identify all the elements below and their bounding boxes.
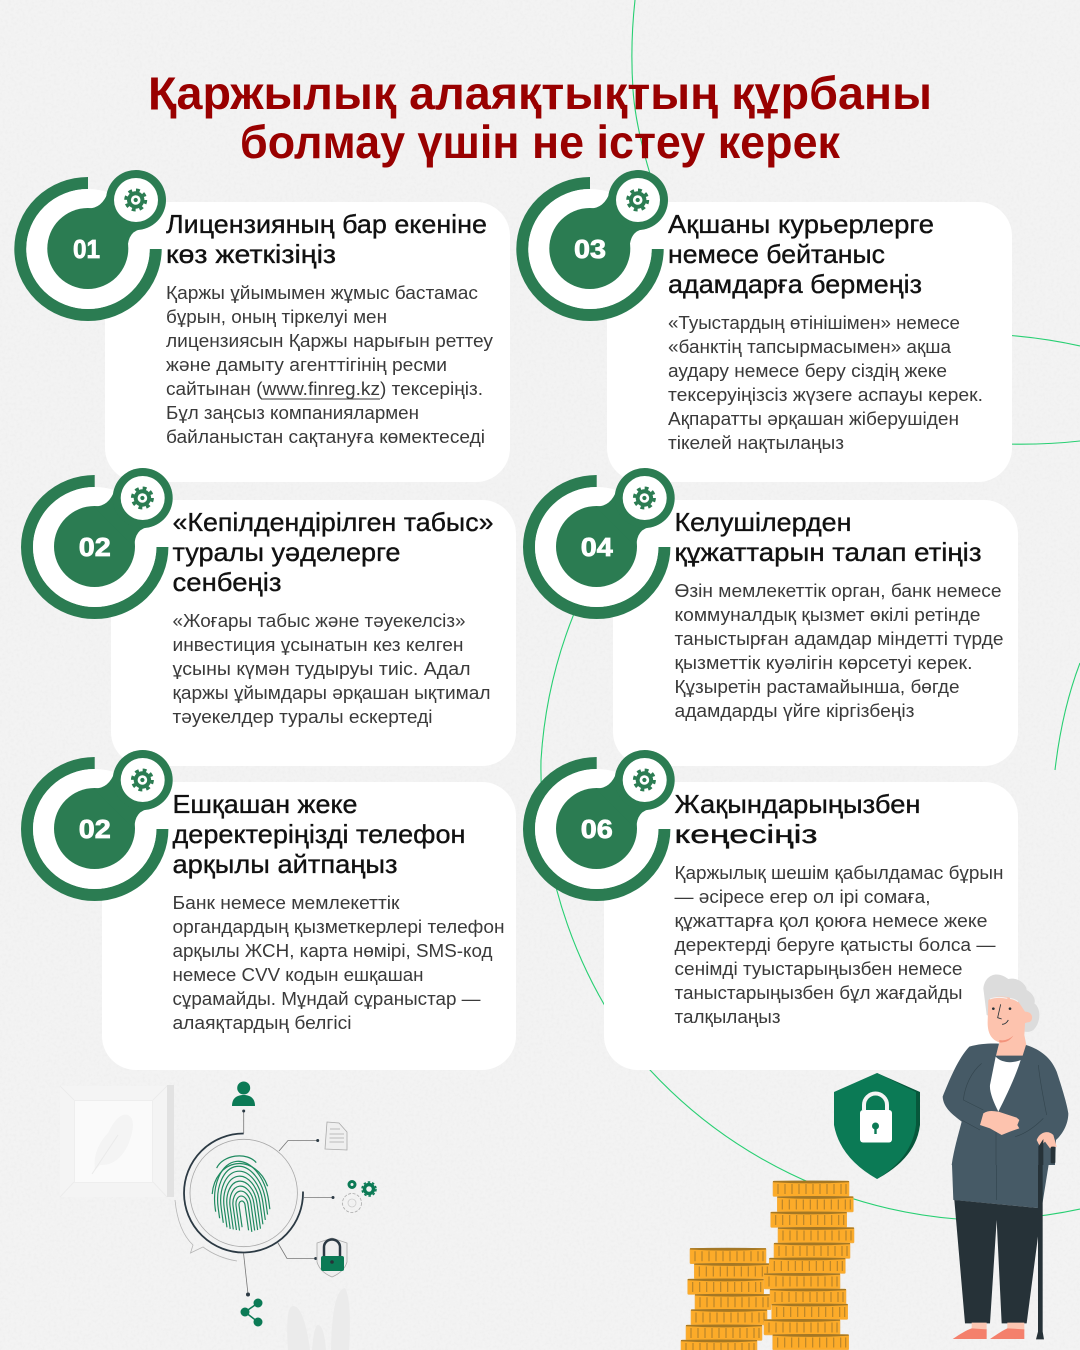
badge 02 (27, 468, 173, 613)
body 02: инвестиция ұсынатын кез келген (172, 635, 464, 655)
icon: padlock shield (317, 1238, 347, 1277)
fingerprint diagram (175, 1082, 376, 1326)
body 02: ұсыны күмән тудыруы тиіс. Адал (172, 659, 470, 679)
body 03: тексеруіңізсіз жүзеге аспауы керек. (668, 385, 983, 405)
heading 02 (172, 507, 494, 597)
icon: share (241, 1299, 262, 1326)
badge 02: 02 (79, 532, 111, 562)
body 06: таныстарыңызбен бұл жағдайды (674, 983, 962, 1003)
body 02: қаржы ұйымдары әрқашан ықтимал (172, 683, 490, 703)
badge 04: 04 (581, 532, 613, 562)
body 04 (674, 581, 1004, 721)
body 01: Қаржы ұйымымен жұмыс бастамас (166, 283, 478, 303)
panel: card 06 (529, 750, 1018, 1070)
heading 05: деректеріңізді телефон (172, 819, 466, 849)
heading 03: немесе бейтаныс (668, 239, 885, 269)
panel: card 03 (522, 170, 1012, 482)
body 03 (668, 313, 983, 453)
panel: card 02 (27, 468, 516, 766)
body 03: аудару немесе беру сіздің жеке (668, 361, 947, 381)
heading 01: көз жеткізіңіз (166, 239, 336, 269)
body 05: сұрамайды. Мұндай сұраныстар — (172, 989, 481, 1009)
body 05 (172, 893, 504, 1033)
icon: document (325, 1122, 347, 1150)
body 02: тәуекелдер туралы ескертеді (172, 707, 432, 727)
fingerprint (207, 1152, 274, 1237)
body 06: сенімді туыстарыңызбен немесе (674, 959, 962, 979)
title: болмау үшін не істеу керек (240, 116, 841, 168)
heading 03: адамдарға бермеңіз (668, 269, 922, 299)
heading 04 (674, 507, 982, 567)
badge 06: 06 (581, 814, 613, 844)
heading 06 (674, 789, 920, 849)
body 05: органдардың қызметкерлері телефон (172, 917, 504, 937)
heading 02: «Кепілдендірілген табыс» (172, 507, 494, 537)
badge 02 second (27, 750, 173, 895)
heading 03: Ақшаны курьерлерге (668, 209, 934, 239)
badge 01 (20, 170, 166, 315)
badge 04 (529, 468, 675, 613)
body 04: таныстырған адамдар міндетті түрде (674, 629, 1004, 649)
body 06: — әсіресе егер ол ірі сомаға, (674, 887, 930, 907)
body 05: алаяқтардың белгісі (172, 1013, 352, 1033)
body 05: немесе CVV кодын ешқашан (172, 965, 424, 985)
elderly woman with cane (943, 974, 1068, 1339)
heading 01 (166, 209, 487, 269)
body 01: Бұл заңсыз компаниялармен (166, 403, 419, 423)
body 06: талқылаңыз (674, 1007, 780, 1027)
panel: card 05 (27, 750, 516, 1070)
body 01: бұрын, оның тіркелуі мен (166, 307, 387, 327)
body 01: және дамыту агенттігінің ресми (166, 355, 447, 375)
body 04: адамдарды үйге кіргізбеңіз (674, 701, 914, 721)
decorative green curves (541, 0, 1080, 1220)
heading 05: Ешқашан жеке (172, 789, 358, 819)
heading 02: туралы уәделерге (172, 537, 400, 567)
icon: green security shield (834, 1073, 920, 1179)
body 01 (166, 283, 493, 447)
woman lower body (952, 1112, 1057, 1339)
faint cactus illustration (287, 1288, 350, 1350)
coin stacks (681, 1180, 854, 1350)
title: Қаржылық алаяқтықтың құрбаны (148, 67, 932, 119)
heading 06: Жақындарыңызбен (674, 789, 920, 819)
left coin stack (681, 1248, 771, 1350)
heading 05 (172, 789, 466, 879)
body 01: лицензиясын Қаржы нарығын реттеу (166, 331, 493, 351)
body 06: құжаттарға қол қоюға немесе жеке (674, 911, 988, 931)
badge 03 (522, 170, 668, 315)
body 03: «банктің тапсырмасымен» ақша (668, 337, 952, 357)
heading 02: сенбеңіз (172, 567, 282, 597)
connectors (244, 1111, 333, 1294)
icon: person (232, 1082, 255, 1106)
body 05: Банк немесе мемлекеттік (172, 893, 400, 913)
panel: card 04 (529, 468, 1018, 766)
panel: card 01 (20, 170, 510, 482)
heading 05: арқылы айтпаңыз (172, 849, 398, 879)
woman upper body (943, 974, 1068, 1165)
icon: gears (342, 1182, 376, 1212)
heading 04: Келушілерден (674, 507, 852, 537)
badge 03: 03 (574, 234, 606, 264)
body 01: сайтынан (www.finreg.kz) тексеріңіз. (166, 379, 483, 399)
body 06: деректерді беруге қатысты болса — (674, 935, 996, 955)
faint window illustration (60, 1085, 174, 1197)
body 04: коммуналдық қызмет өкілі ретінде (674, 605, 980, 625)
body 03: «Туыстардың өтінішімен» немесе (668, 313, 960, 333)
body 03: тікелей нақтылаңыз (668, 433, 844, 453)
body 05: арқылы ЖСН, карта нөмірі, SMS-код (172, 941, 493, 961)
fingerprint ring (175, 1133, 303, 1261)
badge 02 second: 02 (79, 814, 111, 844)
body 06 (674, 863, 1004, 1027)
body 02 (172, 611, 490, 727)
heading 01: Лицензияның бар екеніне (166, 209, 487, 239)
heading 06: кеңесіңіз (674, 819, 818, 849)
body 01: байланыстан сақтануға көмектеседі (166, 427, 485, 447)
body 06: Қаржылық шешім қабылдамас бұрын (674, 863, 1004, 883)
body 03: Ақпаратты әрқашан жіберушіден (668, 409, 959, 429)
heading 04: құжаттарын талап етіңіз (674, 537, 982, 567)
badge 06 (529, 750, 675, 895)
body 04: қызметтік куәлігін көрсетуі керек. (674, 653, 972, 673)
body 04: Құзыретін растамайынша, бөгде (674, 677, 960, 697)
body 04: Өзін мемлекеттік орган, банк немесе (674, 581, 1002, 601)
right coin stack (764, 1180, 854, 1350)
body 02: «Жоғары табыс және тәуекелсіз» (172, 611, 466, 631)
heading 03 (668, 209, 934, 299)
badge 01: 01 (73, 234, 100, 264)
title (148, 67, 932, 168)
